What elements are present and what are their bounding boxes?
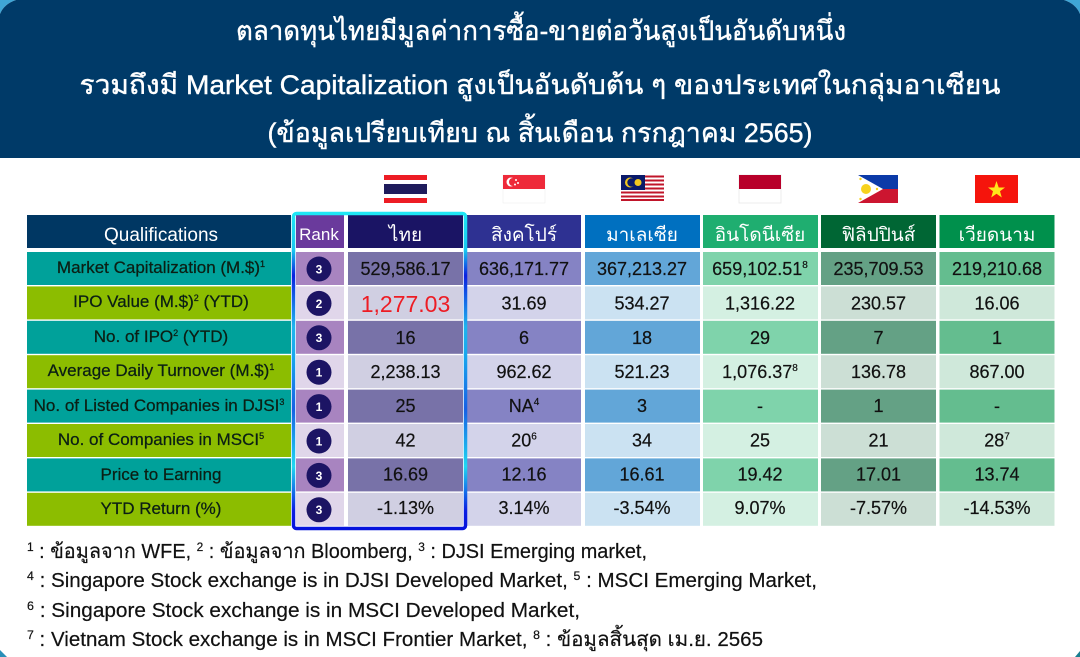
row: Market Capitalization: 219,210.68 bbox=[952, 259, 1042, 279]
row: No. of Listed Companies in DJSI: - bbox=[994, 396, 1000, 416]
row: Average Daily Turnover: 867.00 bbox=[969, 362, 1025, 382]
row: YTD Return: -7.57% bbox=[850, 498, 907, 518]
row: IPO Value: 2 bbox=[194, 293, 199, 303]
row: Market Capitalization: 8 bbox=[802, 260, 808, 271]
row: No. of Companies in MSCI bbox=[27, 424, 1054, 457]
row: No. of IPO bbox=[27, 321, 1054, 354]
title banner: รวมถึงมี Market Capitalization สูงเป็นอันดับต้น ๆ ของประเทศในกลุ่มอาเซียน bbox=[80, 67, 1000, 102]
row: Average Daily Turnover: 1 bbox=[269, 362, 274, 372]
heading: Vietnam: เวียดนาม bbox=[959, 224, 1035, 246]
heading: Singapore bbox=[467, 215, 581, 248]
row: YTD Return: -1.13% bbox=[377, 498, 434, 518]
heading: Thailand bbox=[348, 215, 463, 248]
row: IPO Value: (YTD) bbox=[199, 292, 249, 311]
row: Market Capitalization: 659,102.51 bbox=[712, 259, 802, 279]
footnotes: 7 bbox=[27, 628, 34, 642]
row: No. of Companies in MSCI: 21 bbox=[868, 430, 889, 450]
footnotes bbox=[27, 540, 817, 652]
row: Price to Earning: 12.16 bbox=[501, 464, 547, 484]
flag: Indonesia bbox=[739, 175, 781, 203]
heading: Philippines: ฟิลิปปินส์ bbox=[842, 224, 916, 246]
row: No. of IPO: 18 bbox=[632, 328, 652, 348]
row: No. of IPO: 29 bbox=[750, 328, 770, 348]
row: No. of Listed Companies in DJSI: No. of Listed Companies in DJSI bbox=[34, 396, 279, 415]
row: Market Capitalization: 529,586.17 bbox=[360, 259, 451, 279]
row: No. of IPO: No. of IPO bbox=[94, 327, 173, 346]
footnotes: 3 bbox=[418, 540, 425, 554]
row: No. of Companies in MSCI: 7 bbox=[1004, 432, 1010, 442]
heading: Indonesia bbox=[703, 215, 818, 248]
row: Market Capitalization: 1 bbox=[260, 259, 265, 269]
heading: Qualifications: Qualifications bbox=[104, 225, 218, 246]
row: No. of IPO: 7 bbox=[873, 328, 884, 348]
row: IPO Value: 230.57 bbox=[851, 294, 906, 314]
row: Price to Earning: 13.74 bbox=[974, 464, 1020, 484]
row: No. of Listed Companies in DJSI: 4 bbox=[534, 397, 540, 408]
row: Market Capitalization: 235,709.53 bbox=[833, 259, 924, 279]
row: No. of Listed Companies in DJSI: 1 bbox=[316, 400, 323, 414]
row: Price to Earning bbox=[27, 458, 1054, 491]
table header row bbox=[27, 215, 1054, 248]
row: Price to Earning: 3 bbox=[316, 469, 323, 483]
footnotes: : Vietnam Stock exchange is in MSCI Frontier Market, bbox=[34, 629, 533, 651]
row: No. of Companies in MSCI: 25 bbox=[750, 430, 770, 450]
heading: Malaysia: มาเลเซีย bbox=[606, 224, 678, 246]
heading: Thailand: ไทย bbox=[387, 224, 422, 246]
row: Price to Earning: 16.69 bbox=[383, 464, 428, 484]
row: No. of Companies in MSCI: 20 bbox=[511, 430, 531, 450]
row: No. of Listed Companies in DJSI: 3 bbox=[637, 396, 647, 416]
row: No. of Companies in MSCI: 5 bbox=[259, 431, 264, 441]
row: Average Daily Turnover: 962.62 bbox=[496, 362, 552, 382]
flag: Philippines bbox=[858, 175, 898, 203]
row: Average Daily Turnover: 8 bbox=[792, 363, 798, 374]
row: Price to Earning: Price to Earning bbox=[101, 465, 221, 484]
row: IPO Value: 1,316.22 bbox=[725, 294, 795, 314]
row: Market Capitalization bbox=[27, 252, 1054, 285]
flag: Thailand bbox=[384, 175, 427, 203]
footnotes: 6 bbox=[27, 599, 34, 613]
row: No. of Companies in MSCI: 6 bbox=[531, 432, 537, 442]
row: IPO Value: 16.06 bbox=[974, 294, 1020, 314]
row: No. of IPO: 2 bbox=[173, 328, 178, 338]
row: No. of Listed Companies in DJSI bbox=[27, 390, 1054, 423]
row: No. of Companies in MSCI: 1 bbox=[316, 434, 323, 448]
footnotes: 1 bbox=[27, 540, 34, 554]
footnotes: : DJSI Emerging market, bbox=[425, 541, 647, 563]
row: YTD Return: 3 bbox=[316, 503, 323, 517]
heading: Malaysia bbox=[585, 215, 700, 248]
row: Average Daily Turnover: 521.23 bbox=[614, 362, 670, 382]
row: IPO Value: 31.69 bbox=[501, 294, 547, 314]
row: No. of Companies in MSCI: 28 bbox=[984, 430, 1004, 450]
footnotes: : Singapore Stock exchange is in MSCI Developed Market, bbox=[34, 600, 580, 622]
row: No. of Listed Companies in DJSI: 25 bbox=[395, 396, 416, 416]
footnotes: 5 bbox=[574, 569, 581, 583]
row: YTD Return: 9.07% bbox=[734, 498, 786, 518]
flag: Vietnam bbox=[975, 175, 1018, 203]
heading: Singapore: สิงคโปร์ bbox=[491, 223, 557, 246]
row: No. of IPO: 1 bbox=[992, 328, 1002, 348]
row: Average Daily Turnover: 1,076.37 bbox=[722, 362, 792, 382]
row: Market Capitalization: 3 bbox=[316, 262, 323, 276]
footnotes: 2 bbox=[197, 540, 204, 554]
row: IPO Value: 2 bbox=[316, 297, 323, 311]
title banner: (ข้อมูลเปรียบเทียบ ณ สิ้นเดือน กรกฎาคม 2565) bbox=[268, 113, 812, 149]
row: Price to Earning: 16.61 bbox=[619, 464, 665, 484]
title banner bbox=[0, 0, 1080, 158]
row: YTD Return: -14.53% bbox=[963, 498, 1031, 518]
heading: Rank: Rank bbox=[299, 225, 339, 244]
row: No. of IPO: (YTD) bbox=[178, 327, 228, 346]
row: YTD Return: -3.54% bbox=[613, 498, 671, 518]
row: No. of Listed Companies in DJSI: 1 bbox=[873, 396, 884, 416]
row: No. of IPO: 6 bbox=[519, 328, 529, 348]
row: No. of IPO: 3 bbox=[316, 331, 323, 345]
row: Average Daily Turnover bbox=[27, 355, 1054, 388]
row: No. of Companies in MSCI: 34 bbox=[632, 430, 652, 450]
flag: Malaysia bbox=[621, 175, 664, 201]
row: No. of Listed Companies in DJSI: NA bbox=[509, 396, 534, 416]
row: IPO Value bbox=[27, 286, 1054, 319]
footnotes: : ข้อมูลจาก WFE, bbox=[34, 541, 197, 564]
row: No. of Companies in MSCI: No. of Companies in MSCI bbox=[58, 430, 259, 449]
row: IPO Value: IPO Value (M.$) bbox=[73, 292, 194, 311]
row: YTD Return bbox=[27, 493, 1054, 526]
title banner: ตลาดทุนไทยมีมูลค่าการซื้อ-ขายต่อวันสูงเป็นอันดับหนึ่ง bbox=[236, 11, 846, 48]
row: Market Capitalization: 367,213.27 bbox=[597, 259, 687, 279]
highlight frame around Thailand column bbox=[294, 214, 466, 528]
row: No. of Listed Companies in DJSI: - bbox=[757, 396, 763, 416]
row: Market Capitalization: Market Capitalization (M.$) bbox=[57, 258, 260, 277]
footnotes: : ข้อมูลจาก Bloomberg, bbox=[203, 541, 418, 564]
heading: Vietnam bbox=[940, 215, 1054, 248]
heading: Indonesia: อินโดนีเซีย bbox=[715, 223, 805, 246]
row: YTD Return: YTD Return (%) bbox=[101, 499, 221, 518]
row: Average Daily Turnover: Average Daily Turnover (M.$) bbox=[48, 361, 269, 380]
row: No. of Companies in MSCI: 42 bbox=[395, 430, 416, 450]
row: Market Capitalization: 636,171.77 bbox=[479, 259, 569, 279]
row: IPO Value: 534.27 bbox=[614, 294, 670, 314]
footnotes: : Singapore Stock exchange is in DJSI Developed Market, bbox=[34, 570, 574, 592]
row: Price to Earning: 17.01 bbox=[856, 464, 901, 484]
footnotes: 4 bbox=[27, 569, 34, 583]
row: Price to Earning: 19.42 bbox=[737, 464, 783, 484]
row: Average Daily Turnover: 136.78 bbox=[851, 362, 906, 382]
heading: Qualifications bbox=[27, 215, 291, 248]
row: No. of Listed Companies in DJSI: 3 bbox=[279, 397, 284, 407]
footnotes: 8 bbox=[533, 628, 540, 642]
row: Average Daily Turnover: 1 bbox=[316, 366, 323, 380]
heading: Philippines bbox=[821, 215, 936, 248]
footnotes: : ข้อมูลสิ้นสุด เม.ย. 2565 bbox=[540, 625, 763, 652]
footnotes: : MSCI Emerging Market, bbox=[580, 570, 817, 592]
row: IPO Value: 1,277.03 bbox=[361, 291, 450, 317]
row: Average Daily Turnover: 2,238.13 bbox=[370, 362, 441, 382]
flags row bbox=[384, 175, 1018, 203]
row: No. of IPO: 16 bbox=[395, 328, 416, 348]
flag: Singapore bbox=[503, 175, 545, 203]
heading: Rank bbox=[296, 215, 344, 248]
row: YTD Return: 3.14% bbox=[498, 498, 550, 518]
